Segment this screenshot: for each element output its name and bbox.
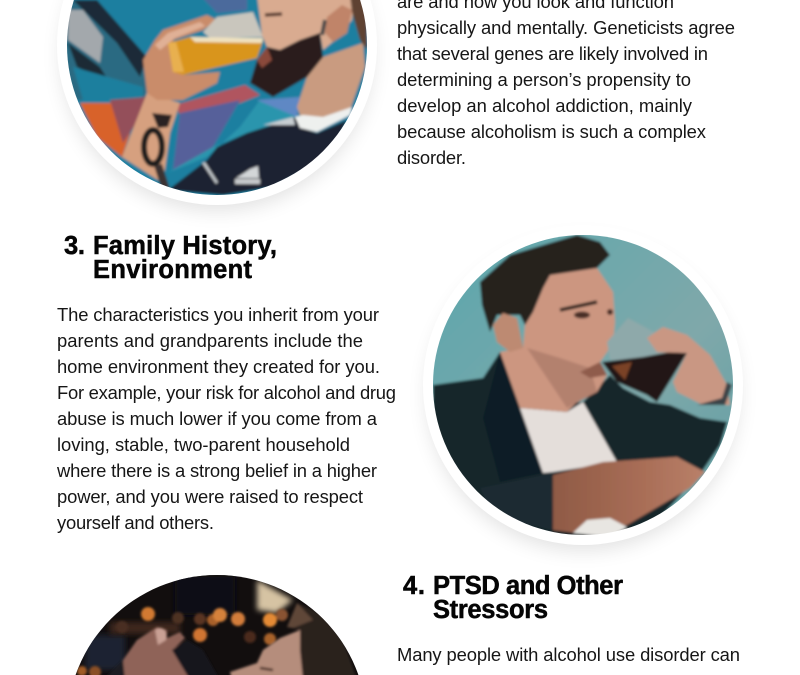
heading: 3. Family History, Environment bbox=[64, 232, 277, 284]
text block: family history paragraph: For example, your risk for alcohol and drug bbox=[57, 382, 396, 403]
text block: family history paragraph: yourself and others. bbox=[57, 512, 214, 533]
text block: family history paragraph: parents and grandparents include the bbox=[57, 330, 363, 351]
text block: family history paragraph bbox=[56, 304, 396, 533]
heading: 4. PTSD and Other Stressors: Stressors bbox=[433, 596, 548, 624]
text block: genetics paragraph end: develop an alcohol addiction, mainly bbox=[397, 95, 693, 116]
heading: 4. PTSD and Other Stressors bbox=[403, 572, 623, 624]
heading: 3. Family History, Environment: 3. bbox=[64, 232, 85, 260]
text block: family history paragraph: power, and you were raised to respect bbox=[57, 486, 363, 507]
heading: 4. PTSD and Other Stressors: PTSD and Other bbox=[433, 572, 623, 600]
photo: man drinking dark drink bbox=[423, 225, 743, 550]
icon: adidas logo bbox=[235, 166, 260, 184]
text block: family history paragraph: The characteristics you inherit from your bbox=[57, 304, 379, 325]
text block: PTSD paragraph start: Many people with alcohol use disorder can bbox=[397, 644, 740, 665]
bokeh lights bbox=[77, 607, 288, 675]
photo: man drinking beer bbox=[57, 0, 380, 210]
text block: genetics paragraph end: disorder. bbox=[397, 147, 466, 168]
text block: genetics paragraph end: physically and mentally. Geneticists agree bbox=[397, 17, 735, 38]
photo: person drinking from a bottle at night bbox=[76, 575, 358, 675]
text block: family history paragraph: where there is a strong belief in a higher bbox=[56, 460, 377, 481]
text block: family history paragraph: home environment they created for you. bbox=[57, 356, 380, 377]
text block: genetics paragraph end: because alcoholism is such a complex bbox=[397, 121, 706, 142]
heading: 4. PTSD and Other Stressors: 4. bbox=[403, 572, 425, 600]
text block: genetics paragraph end: that several genes are likely involved in bbox=[397, 43, 708, 64]
text block: family history paragraph: loving, stable, two-parent household bbox=[57, 434, 350, 455]
text block: genetics paragraph end bbox=[397, 0, 735, 168]
text block: genetics paragraph end: determining a person’s propensity to bbox=[397, 69, 691, 90]
heading: 3. Family History, Environment: Environment bbox=[93, 256, 252, 284]
heading: 3. Family History, Environment: Family History, bbox=[93, 232, 277, 260]
text block: family history paragraph: abuse is much lower if you come from a bbox=[57, 408, 378, 429]
